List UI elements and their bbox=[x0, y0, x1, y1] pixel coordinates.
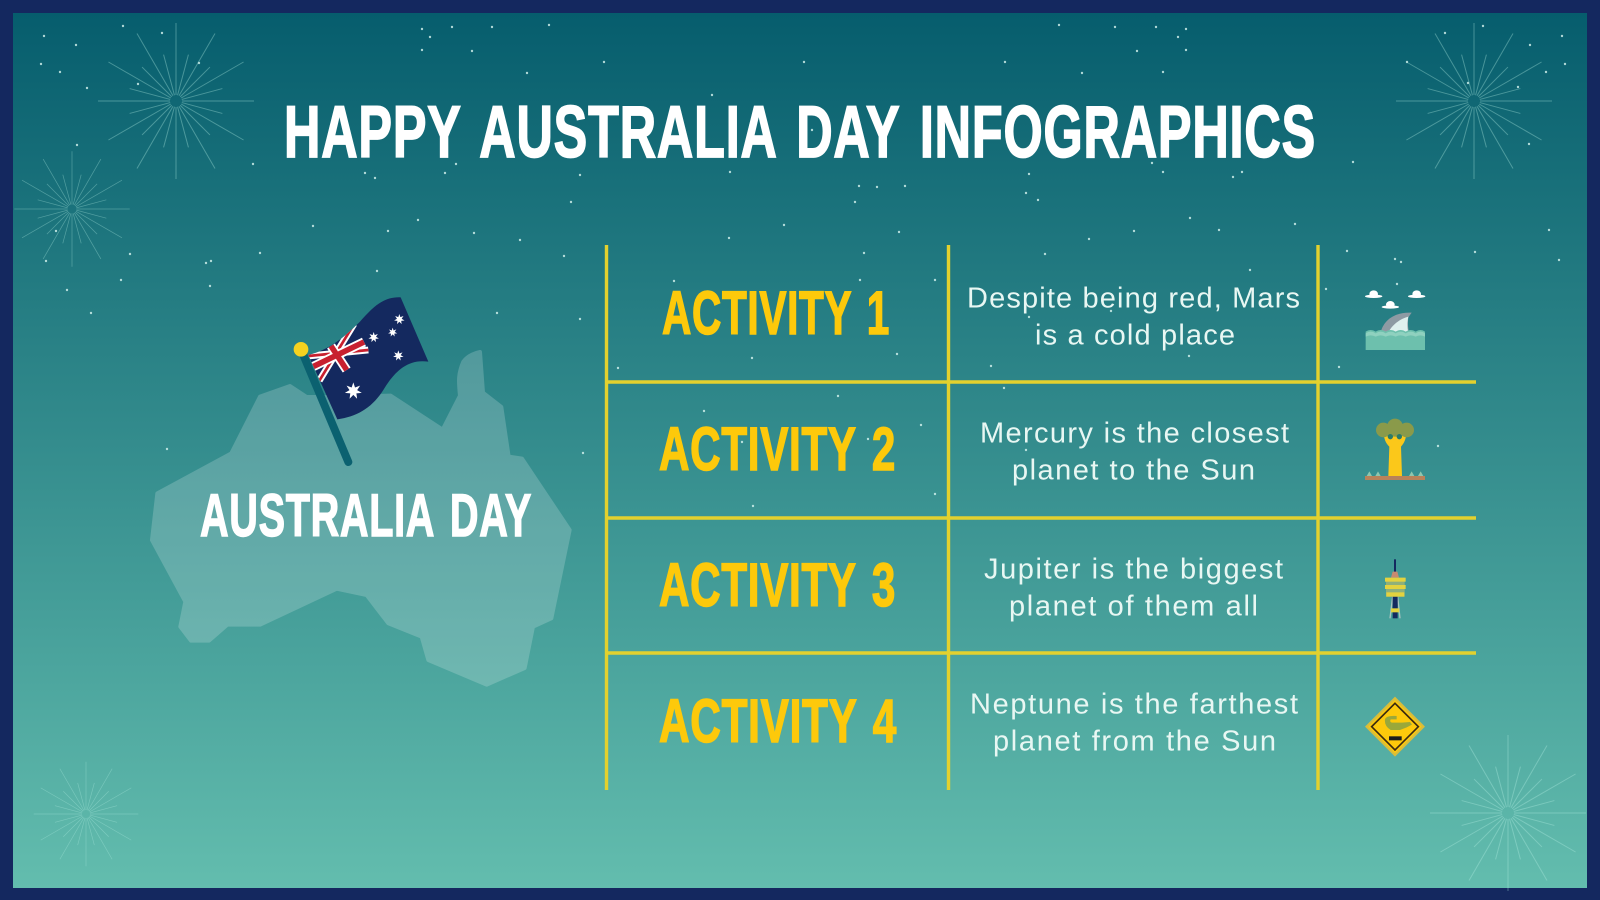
starry sky dots bbox=[40, 24, 1566, 507]
icon: crocodile road sign bbox=[1365, 697, 1425, 757]
flag cloth bbox=[308, 297, 428, 419]
flag pole bbox=[301, 349, 348, 462]
activity 1 label: ACTIVITY 1 bbox=[662, 279, 890, 347]
activity 4 description: planet from the Sun bbox=[993, 726, 1276, 758]
row 3 bbox=[659, 551, 1406, 622]
firework top left bbox=[98, 23, 254, 179]
activity 2 description: Mercury is the closest bbox=[980, 418, 1289, 450]
icon: Sydney tower bbox=[1385, 559, 1406, 618]
activity 3 label: ACTIVITY 3 bbox=[659, 551, 896, 619]
flag stars bbox=[345, 314, 405, 399]
map label: AUSTRALIA DAY bbox=[200, 482, 532, 549]
union jack bbox=[308, 324, 368, 381]
icon: boab tree bbox=[1365, 419, 1425, 480]
firework left bbox=[14, 151, 130, 267]
activity 4 label: ACTIVITY 4 bbox=[659, 687, 897, 755]
firework bottom right bbox=[1430, 735, 1586, 891]
activity 2 label: ACTIVITY 2 bbox=[659, 415, 896, 483]
icon: Australian flag bbox=[294, 297, 428, 462]
firework top right bbox=[1396, 23, 1552, 179]
row 1 bbox=[662, 279, 1425, 352]
icon: shark fin in water bbox=[1365, 290, 1425, 350]
table grid bbox=[605, 245, 1476, 790]
activity 3 description: planet of them all bbox=[1009, 590, 1258, 622]
row 4 bbox=[659, 687, 1425, 758]
map of Australia bbox=[152, 352, 570, 685]
row 2 bbox=[659, 415, 1425, 486]
activity 2 description: planet to the Sun bbox=[1012, 454, 1255, 486]
activity 3 description: Jupiter is the biggest bbox=[984, 554, 1283, 586]
pole knob bbox=[294, 342, 308, 357]
firework bottom left bbox=[34, 762, 138, 866]
activity 4 description: Neptune is the farthest bbox=[970, 688, 1298, 720]
activity 1 description: Despite being red, Mars bbox=[967, 282, 1300, 314]
activity 1 description: is a cold place bbox=[1035, 320, 1235, 352]
panel: Australia map with flag bbox=[152, 297, 570, 685]
